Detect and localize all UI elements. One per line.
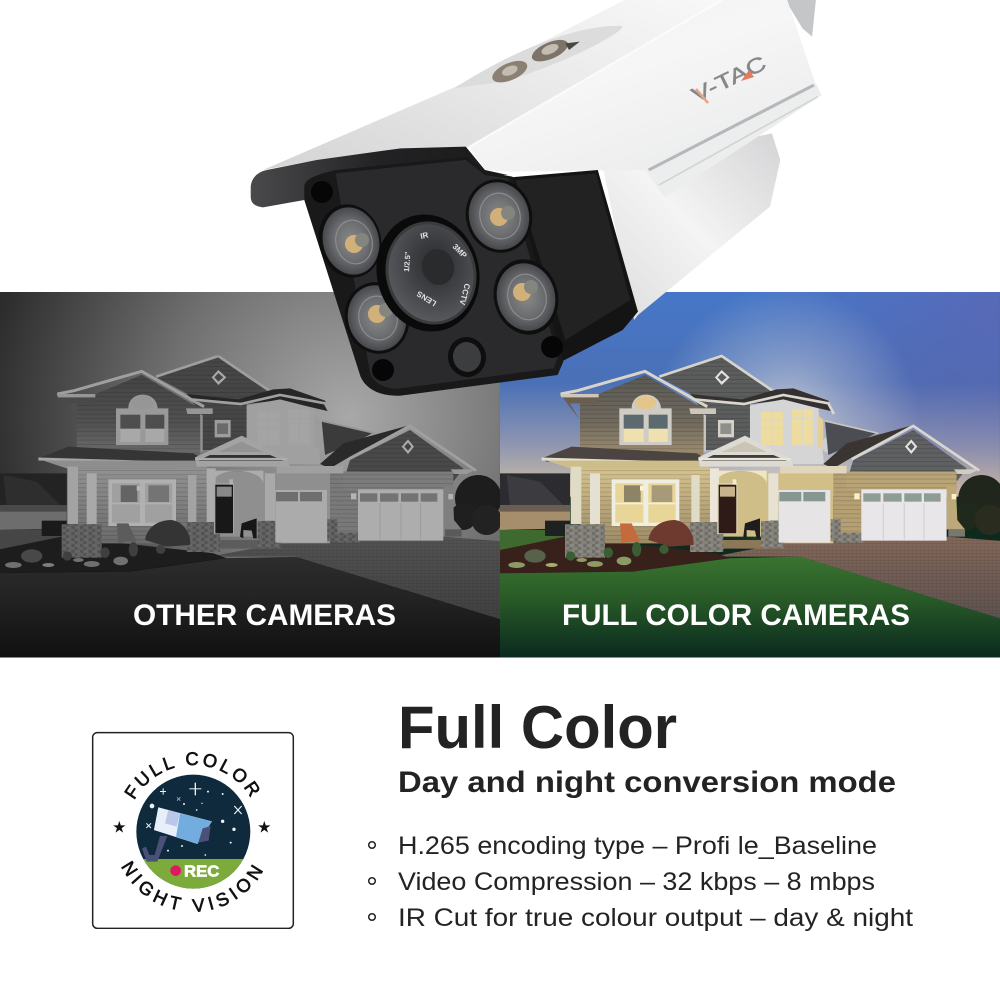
camera photo — [251, 0, 822, 396]
badge: full color night vision — [92, 732, 294, 929]
camera housing — [251, 0, 822, 396]
sky — [0, 290, 500, 590]
main lens: IR — [420, 230, 429, 241]
LED lamps — [310, 172, 567, 361]
main lens: LENS — [415, 289, 438, 308]
arc text bottom: NIGHT VISION — [121, 860, 264, 912]
heading: Full Color — [398, 694, 677, 761]
darkened lawn — [0, 557, 500, 658]
logo: V-TAC: V-TAC — [688, 52, 770, 107]
main lens: 3MP — [451, 242, 469, 261]
bullet 2: Video Compression – 32 kbps – 8 mbps — [398, 868, 875, 896]
bullet 1: H.265 encoding type – Profi le_Baseline — [398, 832, 877, 860]
light sensor — [443, 333, 491, 381]
logo: V-TAC — [688, 52, 770, 107]
house in colour — [500, 356, 1000, 657]
badge circle — [133, 772, 253, 892]
label: full color cameras: FULL COLOR CAMERAS — [562, 599, 910, 632]
house in greyscale — [0, 356, 507, 657]
star right: ★ — [257, 820, 271, 837]
bullet 3: IR Cut for true colour output – day & night — [398, 904, 913, 932]
screw holes — [311, 181, 563, 381]
panel: other cameras — [0, 290, 507, 658]
rec label: REC — [184, 864, 220, 881]
subheading: Day and night conversion mode — [398, 766, 896, 799]
badge frame — [93, 733, 293, 928]
main lens: CCTV — [457, 282, 472, 306]
main lens: 1/2.5" — [402, 251, 412, 272]
sky — [500, 290, 1000, 540]
feature list — [369, 832, 913, 932]
label: other cameras: OTHER CAMERAS — [133, 599, 396, 632]
star left: ★ — [112, 820, 127, 837]
main lens — [363, 203, 493, 343]
stars — [146, 783, 242, 856]
arc text top: FULL COLOR — [124, 752, 260, 800]
icon: mini camera — [142, 807, 212, 862]
panel: full color cameras — [500, 290, 1000, 658]
rec dot — [170, 865, 181, 876]
